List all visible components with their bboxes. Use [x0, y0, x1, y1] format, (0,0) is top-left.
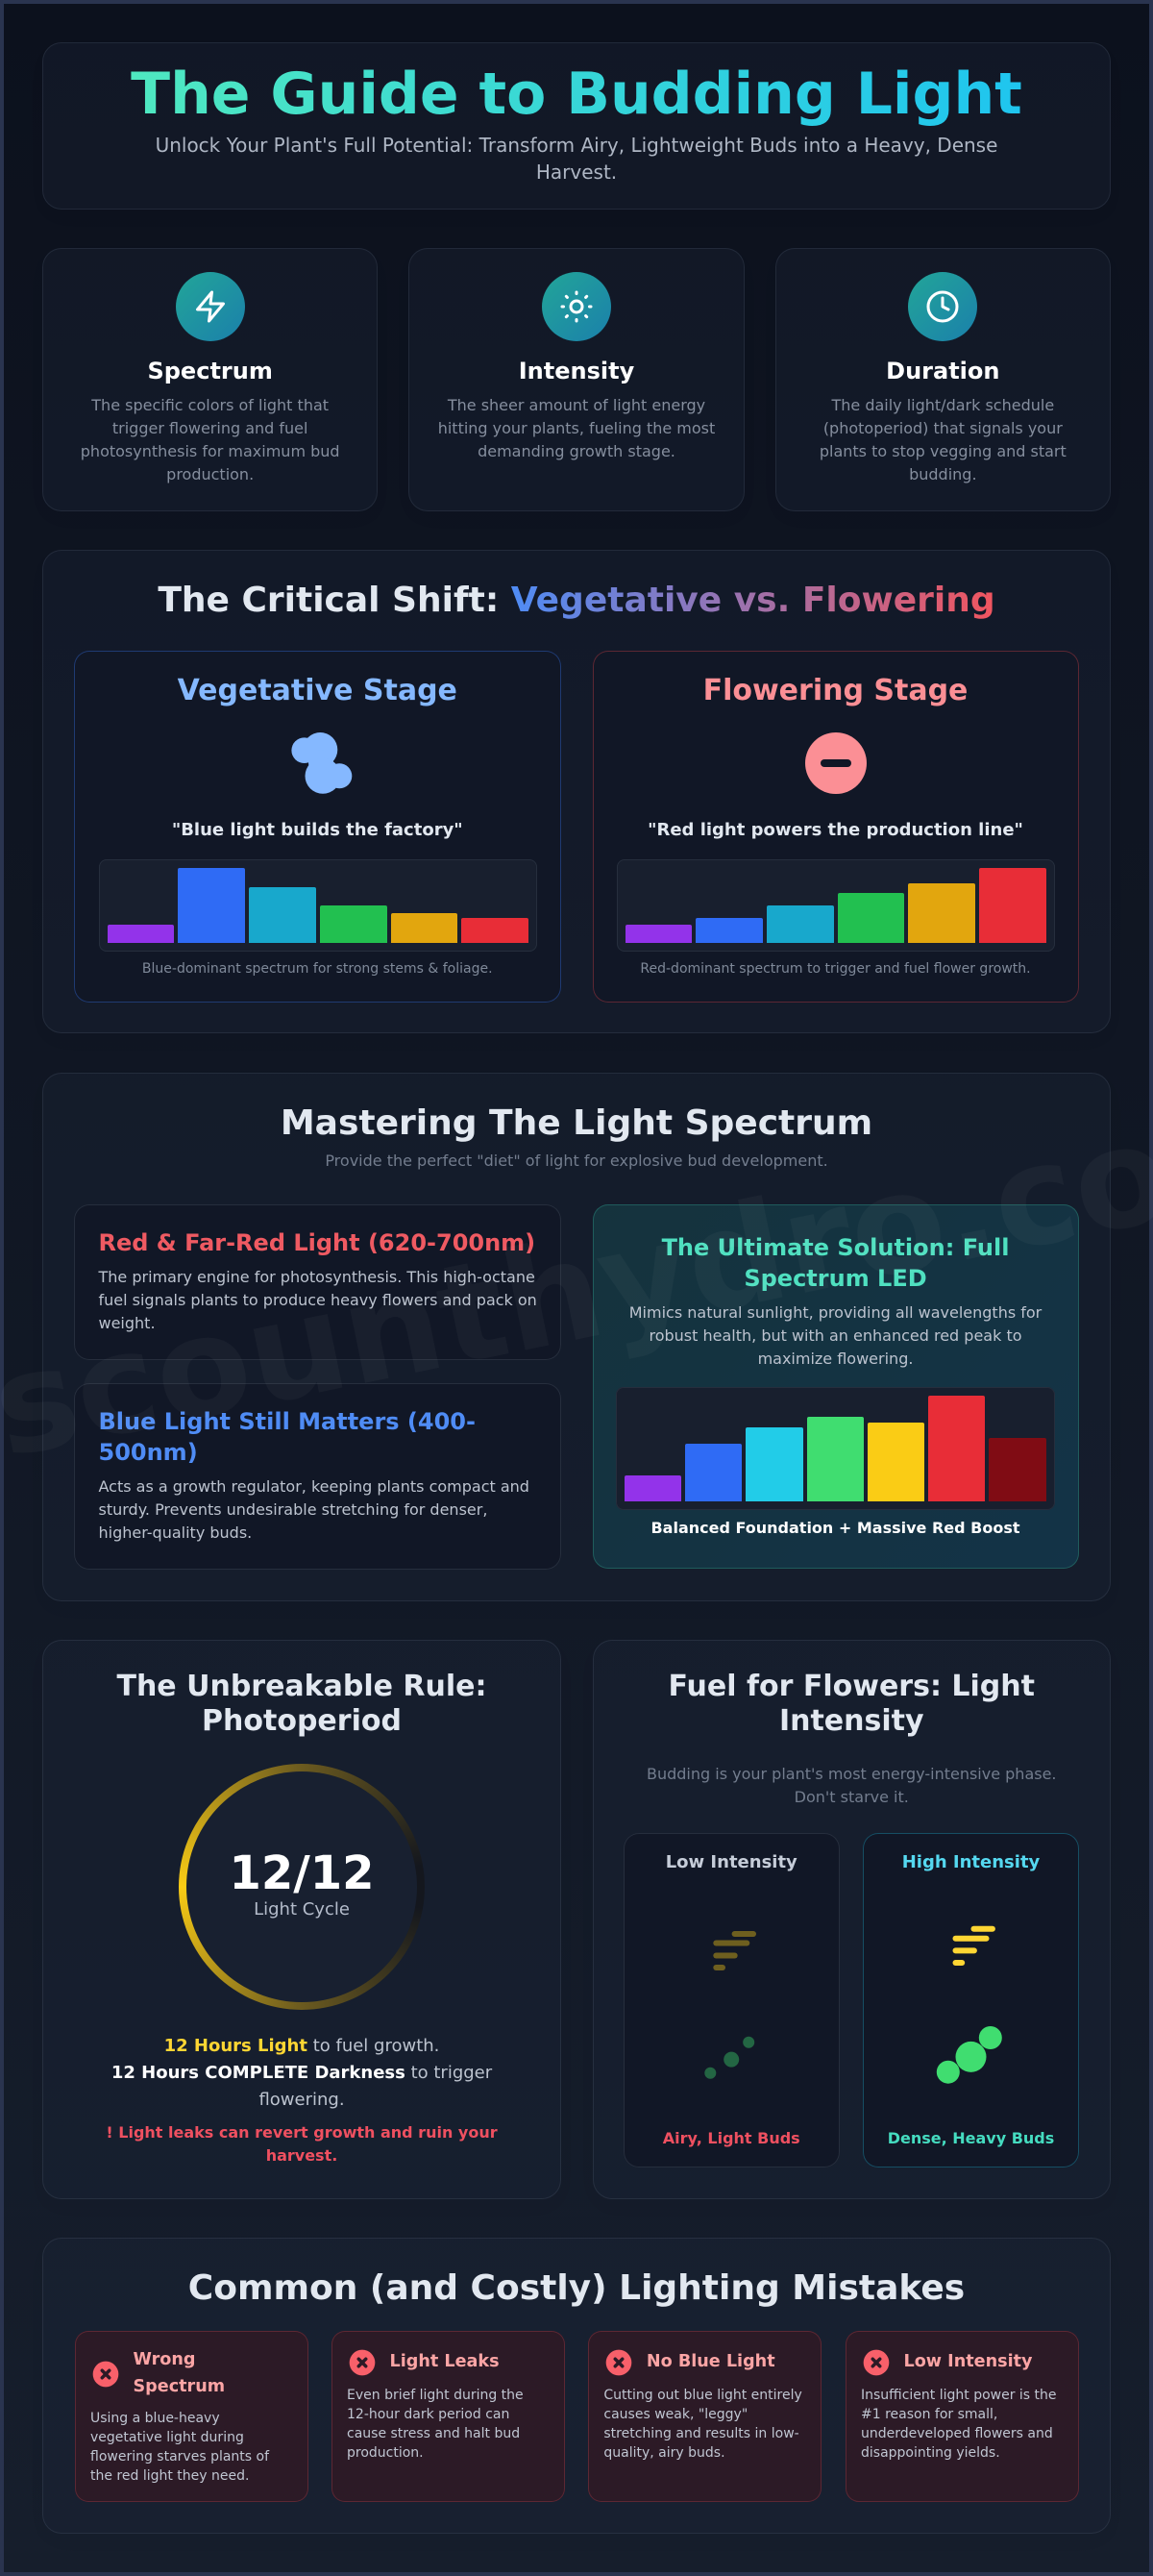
text: ultimate solution — [629, 1303, 1042, 1368]
label: dense buds: Dense, Heavy Buds — [888, 2129, 1054, 2147]
text: blue light — [98, 1476, 529, 1542]
icon: dim light and sparse buds — [704, 1931, 756, 2079]
text: duration description: (photoperiod) that signals your — [823, 419, 1063, 437]
heading: low intensity: Low Intensity — [666, 1852, 797, 1872]
text: spectrum description: production. — [166, 465, 254, 483]
heading: ultimate solution — [661, 1234, 1009, 1292]
text: wrong spectrum: flowering starves plants of — [90, 2449, 269, 2465]
header panel — [42, 42, 1111, 210]
text: duration description — [820, 396, 1067, 483]
text: light and dark schedule — [111, 2036, 492, 2109]
text: low intensity mistake: Insufficient light power is the — [861, 2388, 1057, 2403]
text: red light: fuel signals plants to produce heavy flowers and pack on — [98, 1291, 537, 1309]
text: spectrum description: photosynthesis for maximum bud — [81, 442, 340, 460]
panel: duration pillar — [775, 248, 1111, 511]
text: low intensity mistake: #1 reason for small, — [861, 2407, 997, 2422]
text: intensity description — [438, 396, 715, 460]
icon: lightning bolt — [176, 272, 245, 341]
icon: red circle with minus — [805, 732, 867, 794]
text: intensity subheading: Budding is your plant's most energy-intensive phase. — [647, 1765, 1057, 1782]
text: no blue light: Cutting out blue light entirely — [603, 2388, 802, 2403]
panel: critical shift — [42, 550, 1111, 1033]
bar chart: blue dominant spectrum — [98, 859, 537, 952]
panel: blue light — [74, 1382, 561, 1569]
text: ultimate solution: Mimics natural sunlight, providing all wavelengths for — [629, 1303, 1042, 1322]
caption: vegetative chart: Blue-dominant spectrum for strong stems & foliage. — [142, 961, 493, 977]
text: light leaks — [347, 2388, 524, 2461]
heading: light intensity: Intensity — [779, 1704, 924, 1738]
panel: common mistakes — [42, 2238, 1111, 2534]
ring centre — [186, 1771, 417, 2002]
heading: critical shift: The Critical Shift: Vegetative vs. Flowering — [158, 581, 995, 620]
panel: spectrum pillar — [42, 248, 378, 511]
text: intensity subheading: Don't starve it. — [795, 1788, 909, 1805]
text: light and dark schedule: 12 Hours Light to fuel growth. — [164, 2036, 439, 2055]
text: spectrum description — [81, 396, 340, 483]
heading: low intensity mistake: Low Intensity — [903, 2352, 1032, 2371]
text: duration description: plants to stop vegging and start — [820, 442, 1067, 460]
heading: mastering the light spectrum: Mastering The Light Spectrum — [281, 1103, 872, 1143]
text: light leaks: production. — [347, 2445, 424, 2461]
quote: blue light: "Blue light builds the factory" — [172, 819, 463, 840]
text: light leaks: 12-hour dark period can — [347, 2407, 509, 2422]
text: intensity description: demanding growth stage. — [478, 442, 675, 460]
text: no blue light: causes weak, "leggy" — [603, 2407, 748, 2422]
heading: blue light: Blue Light Still Matters (400- — [98, 1408, 476, 1435]
heading: spectrum: Spectrum — [147, 358, 273, 384]
icon: x mark — [92, 2361, 119, 2388]
card: low intensity — [846, 2331, 1079, 2502]
heading: common mistakes: Common (and Costly) Lighting Mistakes — [188, 2268, 965, 2308]
panel: flowering stage — [592, 651, 1078, 1002]
heading: no blue light: No Blue Light — [647, 2352, 775, 2371]
caption: flowering chart: Red-dominant spectrum to trigger and fuel flower growth. — [640, 961, 1031, 977]
heading: high intensity: High Intensity — [902, 1852, 1040, 1872]
icon: bright light and dense buds — [936, 1926, 1002, 2084]
text: blue light: higher-quality buds. — [98, 1523, 252, 1542]
text: wrong spectrum: vegetative light during — [90, 2430, 244, 2445]
heading: light leaks: Light Leaks — [390, 2352, 500, 2371]
heading: wrong spectrum — [133, 2350, 225, 2396]
heading: light intensity — [669, 1670, 1035, 1738]
quote: red light: "Red light powers the production line" — [648, 819, 1023, 840]
heading: photoperiod: Photoperiod — [202, 1704, 402, 1738]
text: red light — [98, 1268, 537, 1332]
text: wrong spectrum — [90, 2411, 269, 2484]
heading: wrong spectrum: Wrong — [133, 2350, 195, 2369]
heading: ultimate solution: The Ultimate Solution: Full — [662, 1234, 1009, 1261]
heading: duration: Duration — [886, 358, 999, 384]
text: red light: weight. — [98, 1314, 156, 1332]
number: 12/12: 12/12 — [229, 1846, 375, 1900]
heading: photoperiod: The Unbreakable Rule: — [116, 1670, 487, 1703]
text: light leaks: cause stress and halt bud — [347, 2426, 520, 2441]
text: wrong spectrum: the red light they need. — [90, 2468, 249, 2484]
panel: red light — [74, 1204, 561, 1360]
panel: vegetative stage — [74, 651, 561, 1002]
warning: light leaks: ! Light leaks can revert growth and ruin your — [106, 2122, 498, 2142]
text: spectrum description: The specific colors of light that — [91, 396, 329, 414]
icon: x mark — [350, 2349, 375, 2376]
icon: x mark — [605, 2349, 632, 2376]
subtitle — [156, 134, 997, 184]
heading: ultimate solution: Spectrum LED — [744, 1265, 927, 1292]
text: light and dark schedule: flowering. — [258, 2090, 345, 2109]
icon: x mark — [863, 2349, 890, 2376]
text: intensity subheading — [647, 1765, 1057, 1805]
panel: low intensity — [624, 1833, 840, 2167]
text: ultimate solution: robust health, but with an enhanced red peak to — [649, 1326, 1022, 1345]
bar chart: red dominant spectrum — [617, 859, 1055, 952]
text: wrong spectrum: Using a blue-heavy — [90, 2411, 220, 2426]
text: intensity description: The sheer amount of light energy — [448, 396, 705, 414]
panel: full spectrum LED solution — [592, 1204, 1078, 1569]
icon: blue leaf blob — [291, 732, 352, 794]
text: blue light: Acts as a growth regulator, keeping plants compact and — [98, 1476, 529, 1496]
subtitle: Harvest. — [536, 161, 617, 184]
text: light leaks: Even brief light during the — [347, 2388, 524, 2403]
heading: blue light — [98, 1408, 476, 1466]
text: low intensity mistake: disappointing yields. — [861, 2445, 1000, 2461]
heading: flowering stage: Flowering Stage — [703, 674, 968, 707]
heading: blue light: 500nm) — [98, 1439, 198, 1466]
text: low intensity mistake — [861, 2388, 1057, 2461]
panel: light intensity — [592, 1640, 1111, 2199]
text: duration description: budding. — [909, 465, 977, 483]
panel: high intensity — [863, 1833, 1079, 2167]
text: intensity description: hitting your plants, fueling the most — [438, 419, 715, 437]
card: light leaks — [331, 2331, 565, 2502]
text: light and dark schedule: 12 Hours COMPLETE Darkness to trigger — [111, 2063, 492, 2082]
panel: photoperiod — [42, 1640, 561, 2199]
text: low intensity mistake: underdeveloped flowers and — [861, 2426, 1053, 2441]
panel: mastering the light spectrum — [42, 1073, 1111, 1601]
text: no blue light: stretching and results in low- — [603, 2426, 799, 2441]
bar chart: full spectrum — [616, 1387, 1055, 1510]
heading: photoperiod — [116, 1670, 487, 1738]
text: blue light: sturdy. Prevents undesirable stretching for denser, — [98, 1499, 487, 1519]
warning: light leaks: harvest. — [266, 2145, 337, 2165]
panel: intensity pillar — [408, 248, 745, 511]
heading: wrong spectrum: Spectrum — [133, 2377, 225, 2396]
card: wrong spectrum — [75, 2331, 308, 2502]
icon: sun — [542, 272, 611, 341]
subheading: Provide the perfect "diet" of light for explosive bud development. — [325, 1152, 828, 1170]
label: light cycle: Light Cycle — [254, 1899, 350, 1920]
title: The Guide to Budding Light — [131, 61, 1022, 128]
heading: intensity: Intensity — [519, 358, 634, 384]
text: duration description: The daily light/dark schedule — [831, 396, 1054, 414]
text: spectrum description: trigger flowering and fuel — [112, 419, 307, 437]
label: airy buds: Airy, Light Buds — [663, 2129, 800, 2147]
text: ultimate solution: maximize flowering. — [758, 1350, 913, 1368]
warning: light leaks — [106, 2122, 498, 2165]
heading: red light: Red & Far-Red Light (620-700nm) — [98, 1229, 535, 1256]
text: no blue light — [603, 2388, 802, 2461]
heading: vegetative stage: Vegetative Stage — [178, 674, 457, 707]
caption: balanced foundation: Balanced Foundation + Massive Red Boost — [650, 1519, 1020, 1537]
card: no blue light — [588, 2331, 822, 2502]
subtitle: Unlock Your Plant's Full Potential: Transform Airy, Lightweight Buds into a Heavy, Dense — [156, 134, 997, 157]
text: red light: The primary engine for photosynthesis. This high-octane — [98, 1268, 535, 1286]
heading: light intensity: Fuel for Flowers: Light — [669, 1670, 1035, 1703]
chart: 12/12 light cycle ring — [179, 1764, 425, 2010]
text: no blue light: quality, airy buds. — [603, 2445, 725, 2461]
icon: clock — [908, 272, 977, 341]
